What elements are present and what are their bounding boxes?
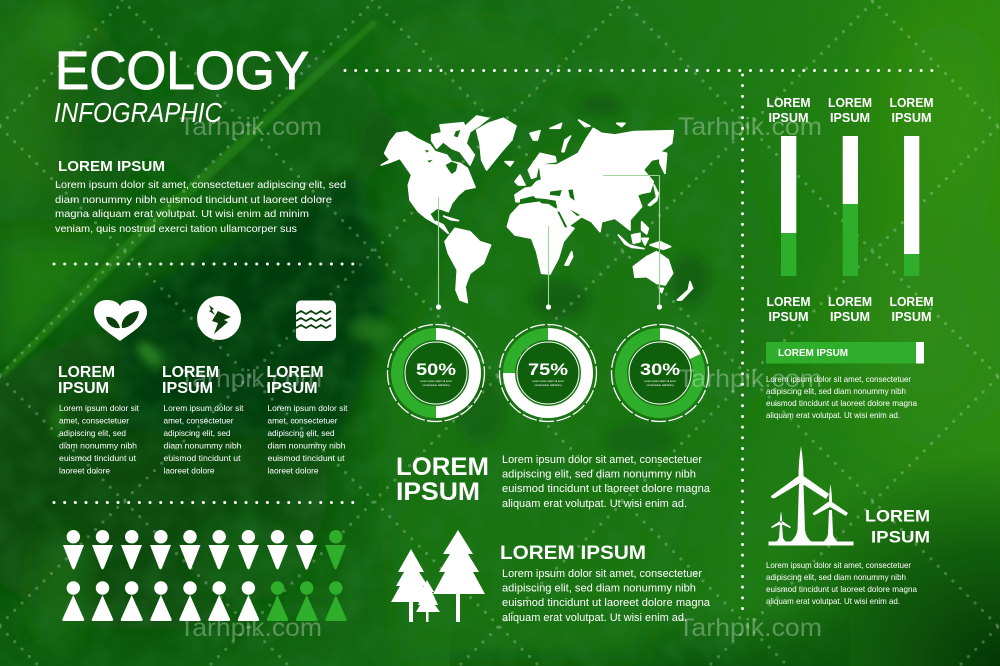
column 1 text: IPSUM	[58, 380, 109, 397]
watermark text: Tarhpik.com	[678, 365, 822, 393]
column 1 text: laoreet dolore	[59, 466, 110, 476]
column 3 text	[266, 364, 348, 476]
donut chart: 50%: 50%	[416, 361, 456, 379]
donut chart: 50%: Lorem ipsum dolor sit amet	[420, 379, 452, 383]
right text block: Lorem ipsum dolor sit amet, consectetuer	[766, 375, 911, 384]
center text block: IPSUM	[396, 478, 480, 506]
column 3 text: IPSUM	[266, 380, 318, 397]
intro text block: veniam, quis nostrud exerci tation ullamcorper sus	[55, 223, 297, 235]
intro text block: LOREM IPSUM	[58, 159, 165, 175]
column 1 text: adipiscing elit, sed	[59, 429, 126, 438]
center text block: adipiscing elit, sed diam nonummy nibh	[502, 468, 696, 480]
column 1 text: Lorem ipsum dolor sit	[59, 404, 140, 413]
lower center text block: euismod tincidunt ut laoreet dolore magna	[502, 597, 711, 609]
center text block	[396, 453, 711, 510]
column 2 text: Lorem ipsum dolor sit	[164, 404, 244, 413]
bar chart labels: bottom	[766, 295, 934, 324]
watermark text: Tarhpik.com	[179, 365, 322, 393]
bar chart labels: top: IPSUM	[768, 111, 808, 125]
bar chart labels: bottom: IPSUM	[892, 310, 932, 324]
right text block: aliquam erat volutpat. Ut wisi enim ad.	[766, 411, 900, 420]
bar chart labels: top: LOREM	[890, 96, 934, 110]
column 1 text: diam nonummy nibh	[59, 442, 137, 450]
watermark text	[179, 113, 822, 642]
donut chart: 75%	[500, 324, 596, 422]
column 3 text: laoreet dolore	[268, 466, 319, 476]
donut chart: 75%: 75%	[528, 361, 568, 379]
lower center text block: adipiscing elit, sed diam nonummy nibh	[502, 582, 696, 594]
column 2 text: LOREM	[162, 364, 219, 381]
icon: heart with leaves	[94, 300, 147, 341]
turbine text block: Lorem ipsum dolor sit amet, consectetuer	[766, 561, 911, 570]
column 1 text: LOREM	[58, 364, 115, 381]
intro text block	[55, 159, 346, 235]
right text block	[766, 375, 917, 420]
column 3 text: LOREM	[266, 364, 324, 381]
center text block: Lorem ipsum dolor sit amet, consectetuer	[502, 454, 702, 466]
map: Africa, Eurasia and Oceania	[505, 120, 693, 300]
column 2 text	[162, 364, 244, 476]
bar chart labels: bottom: LOREM	[890, 295, 934, 309]
bar chart labels: bottom: LOREM	[828, 295, 872, 309]
center text block: aliquam erat volutpat. Ut wisi enim ad.	[502, 498, 687, 510]
connector lines	[436, 176, 662, 310]
pictogram chart: people	[62, 530, 347, 621]
intro text block: magna aliquam erat volutpat. Ut wisi enim ad minim	[55, 208, 309, 220]
lower center text block: aliquam erat volutpat. Ut wisi enim ad.	[502, 612, 687, 624]
bar chart labels: bottom: IPSUM	[768, 310, 808, 324]
bar chart labels: top: LOREM	[828, 96, 872, 110]
donut chart: 30%	[612, 324, 708, 422]
progress bar	[766, 342, 924, 364]
donut chart: 30%: 30%	[640, 361, 680, 379]
turbine text block: euismod tincidunt ut laoreet dolore magna	[766, 585, 917, 594]
watermark text: Tarhpik.com	[179, 614, 322, 642]
intro text block: diam nonummy nibh euismod tincidunt ut laoreet dolore	[55, 194, 332, 206]
column 1 text: amet, consectetuer	[59, 416, 129, 426]
bar chart labels: bottom: IPSUM	[830, 310, 870, 324]
bar chart labels: top	[766, 96, 934, 125]
right text block: euismod tincidunt ut laoreet dolore magna	[766, 399, 917, 408]
donut chart: 30%: consectetuer adipiscing	[646, 383, 674, 387]
turbine text block: adipiscing elit, sed diam nonummy nibh	[766, 573, 906, 582]
watermark text: Tarhpik.com	[179, 113, 322, 141]
right text block: adipiscing elit, sed diam nonummy nibh	[766, 387, 906, 396]
bar chart	[781, 136, 919, 276]
lower center text block	[500, 543, 711, 624]
column 3 text: amet, consectetuer	[268, 416, 338, 426]
column 2 text: adipiscing elit, sed	[164, 429, 231, 438]
column 2 text: laoreet dolore	[164, 466, 215, 476]
column 2 text: diam nonummy nibh	[164, 442, 242, 450]
bar chart labels: top: IPSUM	[830, 111, 870, 125]
turbine heading: IPSUM	[871, 528, 930, 546]
title: INFOGRAPHIC	[54, 97, 223, 128]
column 1 text	[58, 364, 140, 476]
turbine heading	[865, 506, 930, 546]
donut chart: 50%	[388, 324, 484, 422]
column 3 text: diam nonummy nibh	[268, 442, 346, 450]
donut chart: 30%: Lorem ipsum dolor sit amet	[644, 379, 676, 383]
bar chart labels: top: IPSUM	[892, 111, 932, 125]
icon: trees	[391, 530, 485, 622]
center text block: euismod tincidunt ut laoreet dolore magna	[502, 483, 711, 495]
map: Americas and Greenland	[381, 116, 516, 303]
icon: water waves square	[296, 300, 336, 341]
bar chart labels: top: LOREM	[766, 96, 810, 110]
donut chart: 75%: Lorem ipsum dolor sit amet	[532, 379, 564, 383]
column 3 text: adipiscing elit, sed	[268, 429, 335, 438]
icon: wind turbines	[768, 446, 854, 546]
column 2 text: IPSUM	[162, 380, 213, 397]
title	[54, 41, 309, 128]
dotted dividers	[54, 70, 937, 616]
column 3 text: Lorem ipsum dolor sit	[268, 404, 348, 413]
icon: lightning circle	[197, 296, 241, 340]
turbine text block	[766, 561, 917, 606]
column 3 text: euismod tincidunt ut	[268, 454, 345, 463]
world map	[381, 116, 693, 303]
leaf midrib	[0, 20, 378, 378]
bar chart labels: bottom: LOREM	[766, 295, 810, 309]
title: ECOLOGY	[55, 41, 309, 101]
donut chart: 75%: consectetuer adipiscing	[534, 383, 562, 387]
lower center text block: LOREM IPSUM	[500, 543, 646, 564]
column 2 text: euismod tincidunt ut	[164, 454, 241, 463]
turbine heading: LOREM	[865, 506, 930, 526]
column 1 text: euismod tincidunt ut	[59, 454, 137, 463]
column 2 text: amet, consectetuer	[164, 416, 234, 426]
donut chart: 50%: consectetuer adipiscing	[422, 383, 450, 387]
watermark text: Tarhpik.com	[678, 614, 822, 642]
watermark text: Tarhpik.com	[678, 113, 822, 141]
intro text block: Lorem ipsum dolor sit amet, consectetuer adipiscing elit, sed	[55, 179, 346, 191]
turbine text block: aliquam erat volutpat. Ut wisi enim ad.	[766, 597, 900, 606]
center text block: LOREM	[396, 453, 489, 481]
droplet texture	[0, 0, 760, 666]
lower center text block: Lorem ipsum dolor sit amet, consectetuer	[502, 568, 702, 580]
progress bar: LOREM IPSUM	[778, 347, 848, 359]
